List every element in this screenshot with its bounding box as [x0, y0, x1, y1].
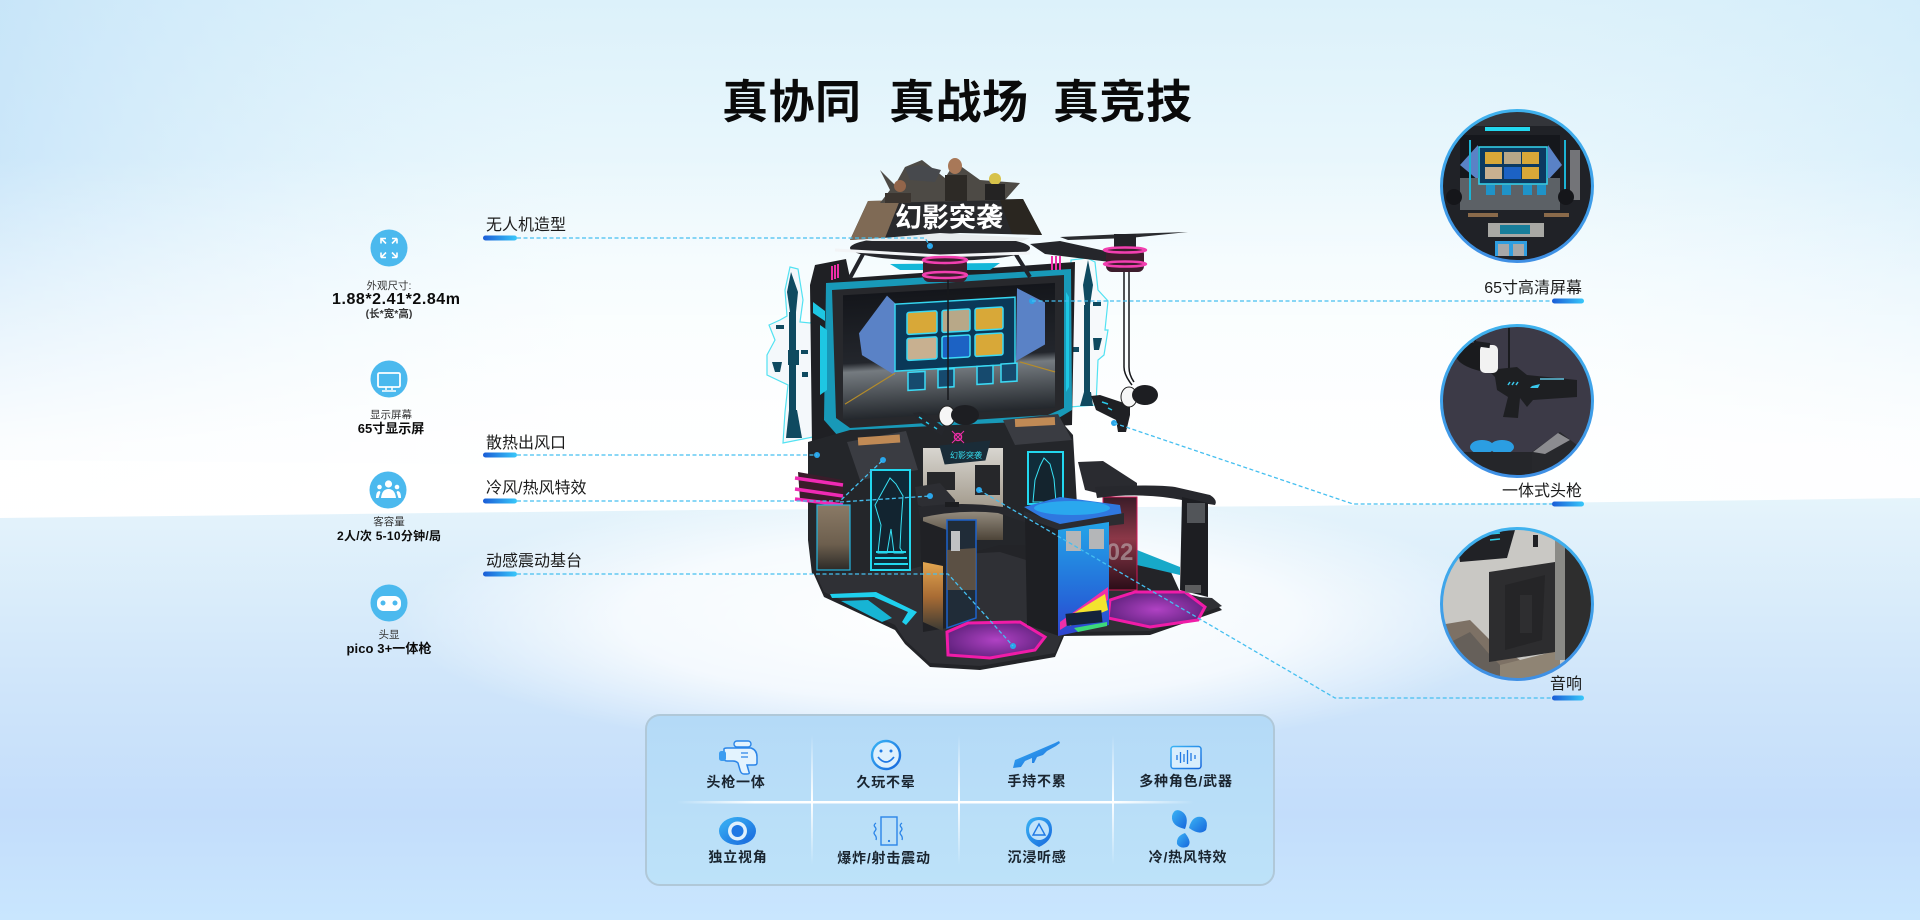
character cards	[908, 363, 1017, 390]
callout: wind effects	[483, 460, 930, 504]
spec: dimensions: 外观尺寸:	[367, 279, 411, 292]
title	[722, 76, 1192, 128]
soldier panel right	[1028, 452, 1063, 504]
feature: vibration: 爆炸/射击震动	[837, 850, 931, 866]
spec: dimensions: (长*宽*高)	[366, 307, 412, 320]
feature: headset gun: 头枪一体	[706, 774, 766, 790]
title: 真战场	[889, 76, 1028, 128]
detail circle: speaker	[1440, 528, 1595, 685]
title: 真竞技	[1053, 76, 1192, 128]
feature: immersive audio: 沉浸听感	[1007, 849, 1067, 865]
arcade machine	[767, 158, 1222, 670]
rotor left	[923, 257, 967, 282]
left booth	[915, 483, 1038, 632]
marquee: 幻影突袭	[895, 203, 1003, 233]
feature: independent view	[708, 817, 768, 865]
feature: fan: 冷/热风特效	[1149, 849, 1227, 865]
feature: independent view: 独立视角	[708, 849, 768, 865]
callout: headset gun: 一体式头枪	[1502, 482, 1582, 500]
callout: audio	[979, 490, 1584, 700]
callout: wind effects: 冷风/热风特效	[486, 479, 586, 497]
base platform	[812, 540, 1222, 670]
callout: audio: 音响	[1550, 675, 1582, 693]
callout: 65 inch screen	[1032, 279, 1584, 304]
soldier figures	[880, 158, 1020, 203]
right booth	[1078, 461, 1216, 597]
rotor right	[1060, 232, 1188, 272]
soldier panel left	[871, 470, 910, 570]
callout: drone shape: 无人机造型	[486, 216, 566, 234]
headset and gun centre	[913, 405, 979, 436]
floor pad: left	[947, 622, 1045, 658]
feature: rifle	[1007, 741, 1067, 789]
right booth: 02	[1107, 539, 1133, 566]
callout: 65 inch screen: 65寸高清屏幕	[1484, 279, 1582, 297]
feature: rifle: 手持不累	[1007, 773, 1067, 789]
missile decoration left	[767, 267, 813, 443]
headset and gun right	[1091, 385, 1158, 432]
spec: capacity: 2人/次 5-10分钟/局	[337, 528, 441, 543]
floor pad: right	[1108, 592, 1205, 627]
callout anchors	[814, 243, 1117, 649]
spec column	[332, 230, 460, 656]
callout: drone shape	[483, 216, 930, 246]
spec: display	[358, 360, 424, 436]
missile decoration right	[1070, 258, 1108, 407]
features panel	[646, 715, 1274, 885]
title: 真协同	[722, 76, 862, 128]
spec: dimensions	[332, 230, 460, 320]
callout: motion base: 动感震动基台	[486, 552, 582, 570]
lower cabinet	[795, 414, 1077, 574]
drone top	[832, 232, 1188, 400]
detail circle: screen	[1440, 110, 1595, 265]
front console	[1024, 497, 1124, 636]
spec: capacity	[337, 472, 441, 543]
feature: vibration	[837, 817, 931, 866]
callout: headset gun	[1114, 423, 1584, 506]
callout: motion base	[483, 552, 1013, 646]
feature: no dizziness	[856, 741, 916, 790]
spec: dimensions: 1.88*2.41*2.84m	[332, 291, 460, 308]
feature: headset gun	[706, 741, 766, 790]
marquee	[850, 158, 1042, 241]
spec: headset	[346, 584, 432, 656]
center photo panel	[923, 441, 1003, 540]
spec: display: 显示屏幕	[370, 408, 412, 421]
feature: characters and weapons: 多种角色/武器	[1139, 773, 1233, 789]
screen	[843, 283, 1055, 420]
upper cabinet	[810, 259, 1075, 445]
spec: headset: pico 3+一体枪	[346, 641, 432, 656]
feature: characters and weapons	[1139, 746, 1233, 789]
spec: display: 65寸显示屏	[358, 421, 424, 436]
callout: heat vent: 散热出风口	[486, 434, 566, 452]
pink vents	[795, 472, 843, 505]
left poster	[817, 505, 850, 570]
callout: heat vent	[483, 434, 817, 458]
crosshair	[952, 431, 964, 443]
spec: capacity: 客容量	[373, 515, 405, 528]
feature: no dizziness: 久玩不晕	[856, 774, 916, 790]
spec: headset: 头显	[378, 629, 400, 641]
feature: fan	[1149, 810, 1227, 865]
game menu	[895, 297, 1015, 371]
center photo panel: 幻影突袭	[950, 450, 982, 460]
detail circle: gun	[1440, 325, 1595, 482]
feature: immersive audio	[1007, 817, 1067, 865]
